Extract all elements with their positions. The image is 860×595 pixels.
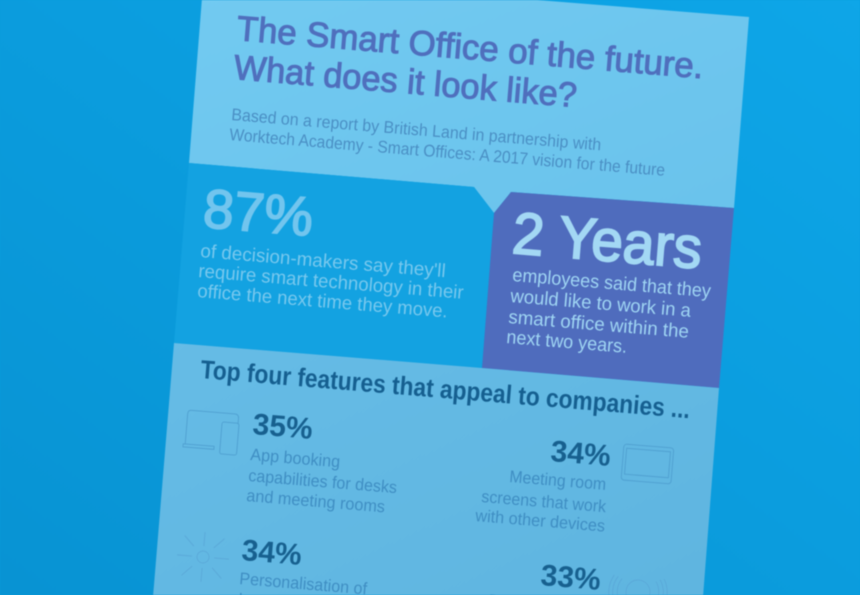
statistic description: employees said that they: [512, 265, 712, 302]
percentage: 34%: [240, 534, 303, 572]
icon: tablet and phone: [183, 410, 240, 455]
subtitle: [229, 105, 666, 180]
description: Meeting room: [509, 467, 607, 494]
description: [246, 445, 398, 516]
statistic description: smart office within the: [508, 307, 690, 343]
description: [474, 467, 607, 536]
panel: 2 years statistic: [482, 192, 734, 388]
statistic: 87%: 87%: [201, 177, 316, 248]
feature: personalisation: [175, 530, 386, 595]
description: screens that work: [481, 487, 607, 516]
statistic description: next two years.: [506, 327, 628, 358]
statistic description: require smart technology in their: [198, 261, 465, 304]
title: What does it look like?: [232, 48, 578, 115]
subtitle: Worktech Academy - Smart Offices: A 2017 vision for the future: [229, 125, 666, 180]
panel: header section: [189, 0, 749, 213]
description: App booking: [250, 445, 341, 471]
percentage: 34%: [549, 435, 612, 473]
panel: top four features: [153, 343, 719, 595]
statistic description: [506, 265, 712, 358]
section heading: Top four features that appeal to companies ...: [200, 354, 691, 424]
statistic: 2 Years: 2 Years: [510, 200, 705, 282]
feature: meeting room screens: [474, 435, 674, 536]
icon: light: [175, 530, 231, 584]
subtitle: Based on a report by British Land in partnership with: [231, 105, 602, 154]
title: The Smart Office of the future.: [235, 9, 705, 86]
panel: 87% statistic: [174, 163, 494, 368]
icon: screen: [621, 444, 674, 484]
description: and meeting rooms: [246, 486, 386, 516]
feature: app booking: [183, 408, 398, 516]
feature: presence sensing: [488, 559, 668, 595]
icon: signal rings: [608, 575, 668, 595]
statistic description: office the next time they move.: [197, 281, 448, 323]
statistic description: [197, 241, 465, 323]
statistic description: would like to work in a: [509, 286, 692, 322]
description: capabilities for desks: [248, 466, 398, 497]
description: with other devices: [474, 506, 606, 536]
percentage: 35%: [251, 408, 314, 446]
statistic description: of decision-makers say they'll: [200, 241, 446, 282]
